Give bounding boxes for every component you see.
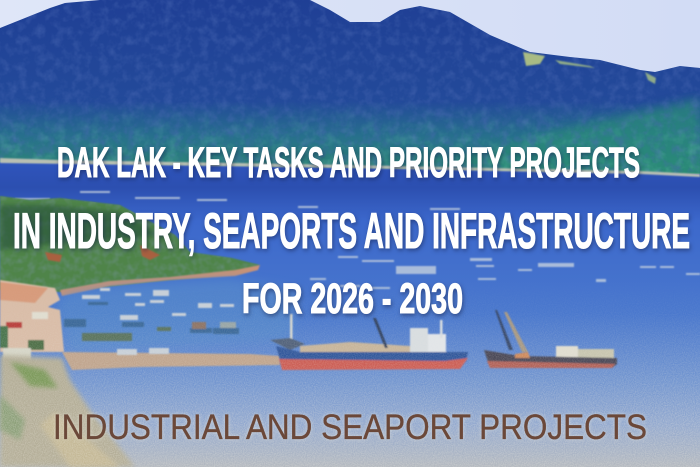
sea: [0, 160, 700, 467]
sea grain texture: [0, 303, 700, 467]
aquaculture rafts: [15, 191, 700, 289]
cargo ship left: [270, 314, 468, 370]
harbour bay: [55, 278, 300, 352]
lower left shore: [0, 355, 135, 467]
fishing boats: [64, 288, 239, 355]
left quay and beach: [0, 280, 64, 360]
title line 3: FOR 2026 - 2030: [242, 275, 463, 323]
mountain: [0, 0, 700, 175]
cargo ship right: [484, 310, 617, 368]
pier: [62, 352, 280, 370]
peninsula: [0, 190, 270, 296]
sky: [0, 0, 700, 170]
far shoreline: [0, 158, 700, 177]
